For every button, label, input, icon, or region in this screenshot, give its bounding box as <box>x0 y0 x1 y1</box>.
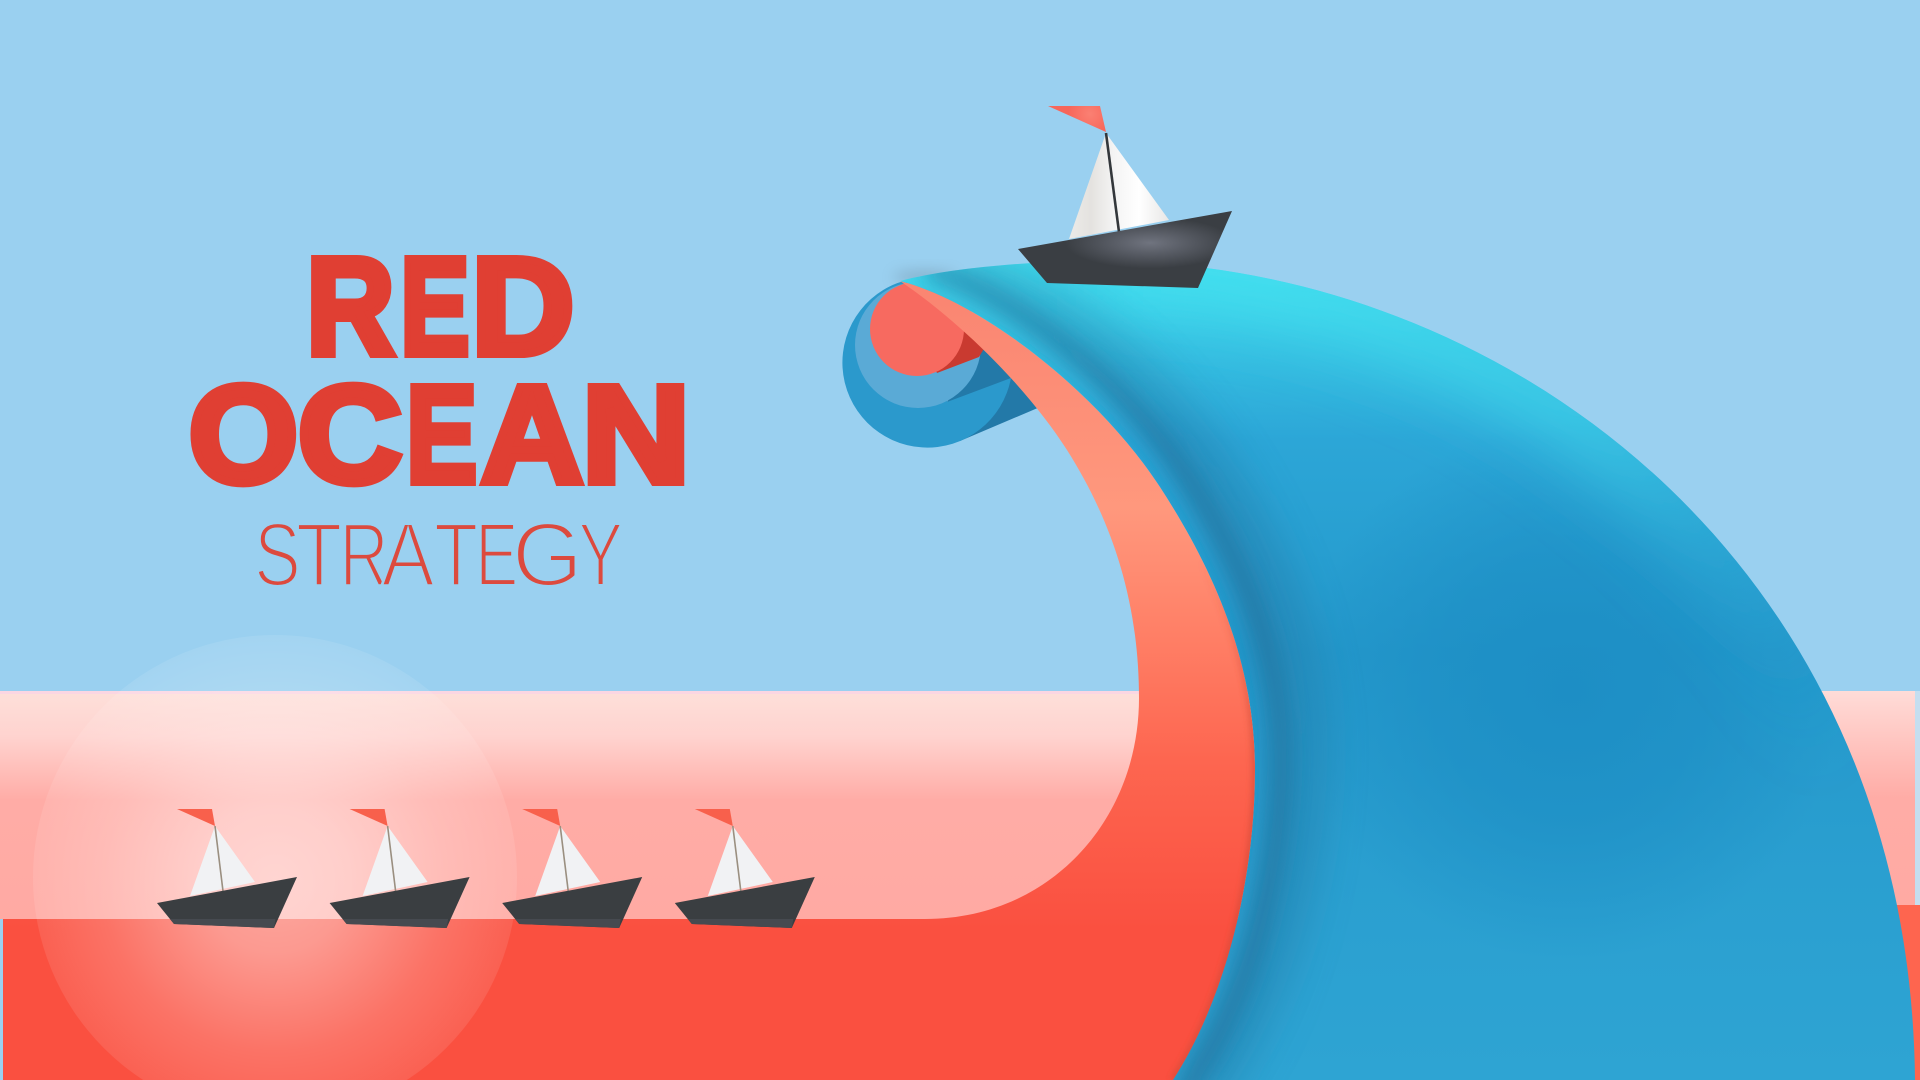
small boat 2 <box>330 809 470 928</box>
heading line: OCEAN: C <box>298 358 402 512</box>
heading line: RED: R <box>306 230 394 384</box>
subheading: STRATEGY: T <box>434 506 478 606</box>
title: RED OCEAN STRATEGY <box>189 230 690 606</box>
small boat 3 <box>502 809 642 928</box>
soft shadow at wave tip <box>893 271 957 283</box>
red wave body <box>900 281 1255 1080</box>
heading line: OCEAN: N <box>582 358 690 512</box>
heading line: RED: D <box>472 230 574 384</box>
flag <box>1048 106 1106 132</box>
crest glow <box>1156 268 1744 585</box>
sail <box>1069 133 1169 239</box>
subheading: STRATEGY: G <box>512 506 583 606</box>
curl red circle <box>870 282 964 376</box>
small boat 4 <box>675 809 815 928</box>
curl dark inner <box>947 340 1060 441</box>
blue wave body <box>900 261 1915 1080</box>
heading line: RED: E <box>400 230 469 384</box>
broad inner shade <box>948 261 1303 1080</box>
curl dark red band <box>920 320 985 373</box>
large boat on wave crest <box>1018 106 1232 288</box>
subheading: STRATEGY: A <box>382 506 434 606</box>
subheading: STRATEGY: T <box>296 506 342 606</box>
mast <box>1106 133 1119 232</box>
subheading: STRATEGY: E <box>475 506 518 606</box>
subheading: STRATEGY: S <box>254 506 301 606</box>
subheading: STRATEGY: Y <box>578 506 623 606</box>
small boat 1 <box>157 809 297 928</box>
hull <box>1018 211 1232 288</box>
narrow inner shade along red edge <box>926 269 1281 1080</box>
wave curl <box>842 271 1060 448</box>
subheading: STRATEGY: R <box>340 506 388 606</box>
heading line: OCEAN: E <box>406 358 477 512</box>
deep blue core <box>1442 511 1698 852</box>
heading line: OCEAN: O <box>189 358 298 512</box>
heading line: OCEAN: A <box>481 358 583 512</box>
curl outer ring <box>842 279 1011 448</box>
translucent halo circle <box>33 635 517 1080</box>
red sea <box>3 905 1920 1080</box>
pink sea band <box>0 691 1920 919</box>
curl light ring <box>855 282 981 408</box>
